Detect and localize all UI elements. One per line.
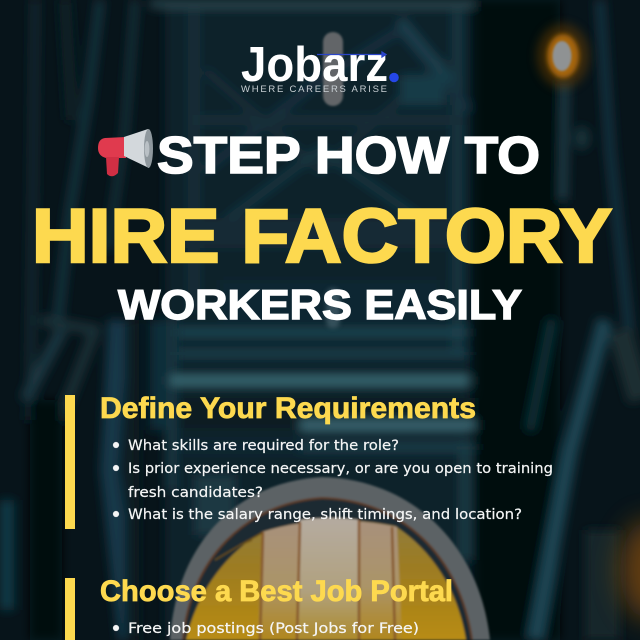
yellow accent bar	[65, 578, 75, 640]
blurred amber light	[537, 24, 640, 620]
title: workers easily: WORKERS EASILY	[118, 281, 522, 328]
section heading: Choose a Best Job Portal	[100, 575, 453, 608]
panel: define your requirements	[65, 392, 553, 529]
icon: megaphone	[98, 129, 153, 176]
logo wordmark: Jobarz	[241, 38, 388, 92]
structure uprights	[188, 10, 200, 310]
centre depth	[165, 0, 470, 640]
bullet list: What is the salary range, shift timings, and location?	[128, 507, 522, 523]
logo tagline: WHERE CAREERS ARISE	[241, 84, 387, 95]
section heading: Define Your Requirements	[100, 392, 476, 425]
bullet list: What skills are required for the role?	[128, 438, 399, 454]
bullet list	[113, 438, 553, 523]
panel: choose a best job portal	[65, 575, 453, 640]
bullet list: fresh candidates?	[128, 485, 263, 501]
logo blue arrow	[317, 52, 386, 57]
right side	[475, 0, 560, 640]
left streaks	[30, 0, 35, 420]
logo: Jobarz	[241, 38, 399, 95]
bullet list: Free job postings (Post Jobs for Free)	[128, 621, 419, 637]
hard hat photo	[170, 477, 490, 640]
top bar	[150, 0, 490, 8]
bullet list: Is prior experience necessary, or are you open to training	[128, 461, 553, 477]
yellow accent bar	[65, 395, 75, 529]
trusses	[205, 60, 445, 170]
title: hire factory: HIRE FACTORY	[32, 194, 612, 279]
lower rows	[178, 328, 468, 337]
blurred pale lamp post	[323, 32, 343, 106]
title: step how to: STEP HOW TO	[157, 127, 540, 185]
logo blue dot	[389, 73, 399, 82]
